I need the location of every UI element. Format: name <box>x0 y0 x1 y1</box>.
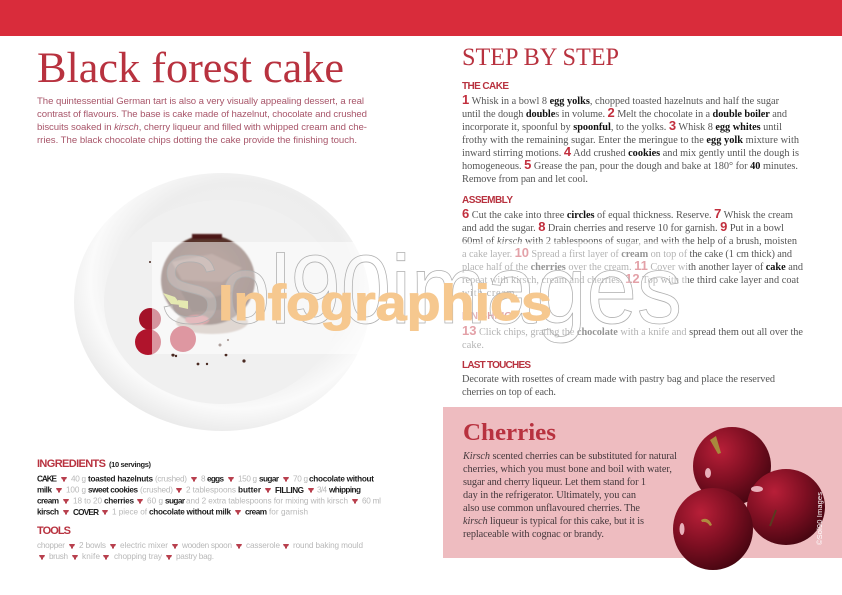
ingredients line 4: cream <box>245 508 267 516</box>
step 13: 13 Click chips, grating the chocolate with a knife and spread them out all over the <box>462 323 803 338</box>
ingredients line 1: toasted hazelnuts <box>88 474 153 484</box>
steps 1 to 5: homogeneous. 5 Grease the pan, pour the dough and bake at 180° for 40 minutes. <box>462 157 798 172</box>
ingredients line 2: milk <box>37 486 52 494</box>
tools list <box>37 541 363 561</box>
ingredients line 4: for garnish <box>269 508 308 516</box>
ingredients line 2: FILLING <box>275 486 304 495</box>
ingredients line 2: (crushed) <box>140 486 173 494</box>
ingredients line 3: and 2 extra tablespoons for mixing with kirsch <box>186 496 348 506</box>
steps 6 to 12: a cake layer. 10 Spread a first layer of cream on top of the cake (1 cm thick) and <box>462 245 793 260</box>
intro text block: biscuits soaked in kirsch, cherry liqueur and filled with whipped cream and che- <box>37 122 367 133</box>
photo credit: ©Sol90 Images <box>815 492 824 545</box>
ingredients line 1: CAKE <box>37 474 58 484</box>
ingredients line 3: 60 g <box>147 496 163 506</box>
section: finishing <box>462 311 803 351</box>
tools list: chopping tray <box>114 552 163 561</box>
ingredients line 3: 60 ml <box>362 496 381 506</box>
step by step heading: STEP BY STEP <box>462 44 619 71</box>
steps 1 to 5 <box>462 92 800 185</box>
intro text block: rries. The black chocolate chips dotting the cake provide the finishing touch. <box>37 135 357 146</box>
ingredients line 4: chocolate without milk <box>149 508 231 516</box>
cherries text: replaceable with cognac or brandy. <box>463 529 604 540</box>
ingredients line 2: 3/4 <box>317 486 327 494</box>
leaves <box>163 293 188 309</box>
title: Black forest cake <box>37 45 344 92</box>
tools heading: TOOLS <box>37 525 71 537</box>
ingredients line 1: sugar <box>259 474 280 484</box>
cherries text: cherries, which you must bone and boil with water, <box>463 464 672 475</box>
ingredients heading: INGREDIENTS <box>37 458 106 470</box>
tools list: chopper <box>37 541 65 550</box>
steps 6 to 12: 6 Cut the cake into three circles of equal thickness. Reserve. 7 Whisk the cream <box>462 206 793 221</box>
intro text block: contrast of flavours. The base is cake made of hazelnut, chocolate and crushed <box>37 109 367 120</box>
steps 1 to 5: inward stirring motions. 4 Add crushed cookies and mix gently until the dough is <box>462 144 799 159</box>
steps 1 to 5: frothy with the remaining sugar. Enter the meringue to the egg yolk mixture with <box>462 135 800 146</box>
heading: assembly: ASSEMBLY <box>462 195 513 206</box>
ingredients line 1: 70 g <box>293 474 308 484</box>
tools list: 2 bowls <box>79 541 106 550</box>
steps 1 to 5: incorporate it, spoonful by spoonful, to the yolks. 3 Whisk 8 egg whites until <box>462 118 782 133</box>
cherries photo <box>673 427 825 570</box>
ingredients line 3 <box>37 496 381 506</box>
steps 1 to 5: Remove from pan and let cool. <box>462 174 588 185</box>
ingredients line 2 <box>37 486 361 495</box>
intro text block <box>37 96 367 146</box>
last touches text <box>462 374 776 398</box>
ingredients line 2: sweet cookies <box>88 486 138 494</box>
cherries text: kirsch liqueur is typical for this cake, but it is <box>463 516 644 527</box>
step 13 <box>462 323 803 351</box>
watermark orange wordmark: Infographics <box>218 275 552 331</box>
steps 6 to 12: and add the sugar. 8 Drain cherries and reserve 10 for garnish. 9 Put in a bowl <box>462 219 784 234</box>
tools list: casserole <box>246 541 280 550</box>
section: assembly <box>462 195 804 299</box>
tools list: pastry bag. <box>176 552 214 561</box>
step 13: cake. <box>462 340 484 351</box>
section: last touches <box>462 360 776 398</box>
watermark outline wordmark: Sol90images <box>160 235 682 344</box>
cherries text <box>462 451 677 540</box>
ingredients line 1: 8 <box>201 474 206 484</box>
cherries text: day in the refrigerator. Ultimately, you can <box>463 490 636 501</box>
tools list: knife <box>82 552 100 561</box>
ingredients line 3: cream <box>37 496 59 506</box>
ingredients line 2: whipping <box>328 486 361 494</box>
tools block <box>37 525 363 561</box>
panel: cherries <box>443 407 842 570</box>
intro text block: The quintessential German tart is also a very visually appealing dessert, a real <box>37 96 364 107</box>
ingredients line 3: sugar <box>165 496 186 506</box>
heading: last touches: LAST TOUCHES <box>462 360 531 371</box>
tools list: electric mixer <box>120 541 168 550</box>
plate cherries <box>135 308 196 355</box>
ingredients line 4: kirsch <box>37 508 59 516</box>
last touches text: cherries on top of each. <box>462 387 556 398</box>
steps 6 to 12: repeat with kirsch, cream and cherries. 12 Top with the third cake layer and coat <box>462 271 799 286</box>
ingredients line 1 <box>37 474 374 484</box>
ingredients line 3: 18 to 20 <box>73 496 102 506</box>
ingredients heading <box>37 458 152 470</box>
crumbs <box>149 261 246 365</box>
ingredients line 1: eggs <box>207 474 224 484</box>
ingredients line 4 <box>37 508 308 517</box>
ingredients line 2: 2 tablespoons <box>186 486 236 494</box>
steps 6 to 12: place half of the cherries over the cream. 11 Cover with another layer of cake and <box>462 258 804 273</box>
heading: finishing: FINISHING <box>462 311 512 322</box>
heading: the cake: THE CAKE <box>462 81 509 92</box>
last touches text: Decorate with rosettes of cream made with pastry bag and place the reserved <box>462 374 776 385</box>
steps 1 to 5: 1 Whisk in a bowl 8 egg yolks, chopped toasted hazelnuts and half the sugar <box>462 92 780 107</box>
section: the cake <box>462 81 800 185</box>
tools list: round baking mould <box>293 541 363 550</box>
cherries heading: Cherries <box>463 420 556 446</box>
cherries text: sugar and cherry liqueur. Let them stand for 1 <box>463 477 646 488</box>
steps 6 to 12: 60ml of kirsch with 2 tablespoons of sugar, and with the help of a brush, moisten <box>462 236 797 247</box>
photo: cake on plate <box>74 173 370 431</box>
ingredients block <box>37 458 381 517</box>
tools list: brush <box>49 552 68 561</box>
ingredients line 1: 40 g <box>71 474 86 484</box>
top red band <box>0 0 842 36</box>
cherries text: also use common unflavoured cherries. The <box>463 503 640 514</box>
ingredients line 1: 150 g <box>238 474 257 484</box>
tools list: wooden spoon <box>181 541 232 550</box>
ingredients line 1: chocolate without <box>309 474 374 484</box>
steps 1 to 5: until the dough doubles in volume. 2 Melt the chocolate in a double boiler and <box>462 105 788 120</box>
ingredients line 2: 100 g <box>66 486 86 494</box>
ingredients line 4: COVER <box>73 508 99 517</box>
ingredients line 4: 1 piece of <box>112 508 148 516</box>
steps 6 to 12: with cream. <box>462 288 518 299</box>
watermark <box>152 235 688 354</box>
ingredients line 3: cherries <box>104 496 134 506</box>
ingredients line 2: butter <box>238 486 262 494</box>
cherries text: Kirsch scented cherries can be substituted for natural <box>462 451 677 462</box>
steps 6 to 12 <box>462 206 804 299</box>
ingredients line 1: (crushed) <box>155 474 187 484</box>
ingredients heading: (10 servings) <box>109 460 152 469</box>
cake <box>161 234 255 334</box>
